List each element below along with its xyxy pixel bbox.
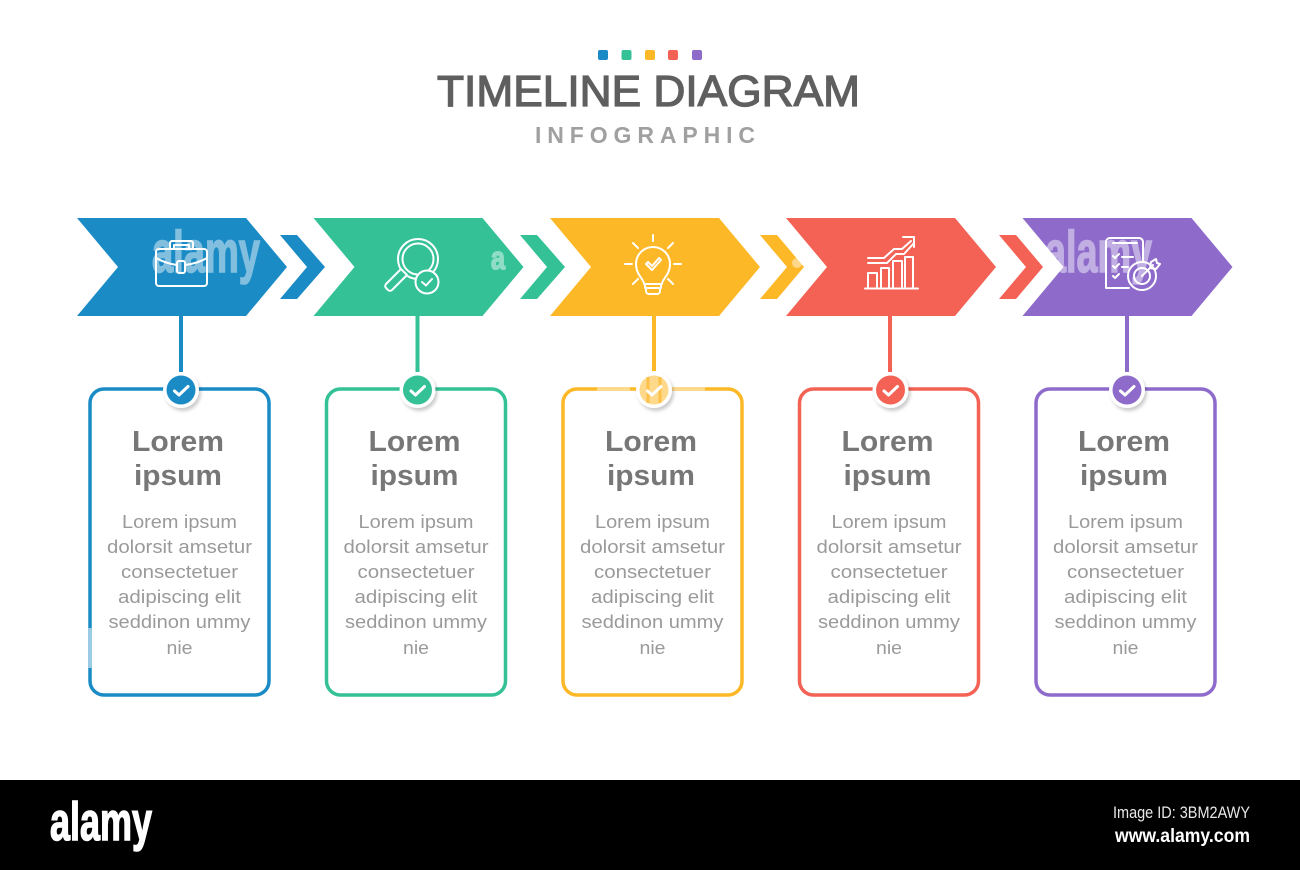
footer logo: alamy [50, 792, 152, 852]
card heading: Lorem [605, 426, 697, 458]
card heading: ipsum [370, 460, 458, 492]
card heading: ipsum [1080, 460, 1168, 492]
card heading: ipsum [844, 460, 932, 492]
connector line [179, 316, 183, 372]
content card [800, 389, 978, 695]
watermark spot [792, 258, 802, 268]
card body text: dolorsit amsetur [580, 537, 725, 557]
check badge [400, 372, 436, 408]
connector line [652, 316, 656, 371]
check badge [872, 372, 908, 408]
check badge [636, 372, 672, 408]
card body text: consectetuer [830, 562, 948, 582]
step 2: green [314, 218, 565, 695]
content card [1036, 389, 1215, 695]
card body text: Lorem ipsum [832, 512, 946, 532]
watermark fade on card edge [88, 628, 92, 668]
card body text: adipiscing elit [1064, 587, 1187, 607]
card body text: adipiscing elit [118, 587, 241, 607]
content card [326, 389, 506, 695]
content card [563, 389, 742, 695]
card body text: consectetuer [121, 562, 238, 582]
card heading: Lorem [132, 426, 224, 458]
image id: Image ID: 3BM2AWY [1113, 803, 1250, 822]
card body text: adipiscing elit [354, 587, 478, 607]
card body text: dolorsit amsetur [107, 537, 252, 557]
card heading: Lorem [842, 426, 934, 458]
card body text: dolorsit amsetur [1053, 537, 1198, 557]
connector line [888, 316, 892, 372]
icon: briefcase [156, 241, 207, 286]
card heading: ipsum [607, 460, 695, 492]
connector chevron [520, 235, 565, 299]
watermark fade on card edge [597, 387, 705, 391]
card body text: dolorsit amsetur [816, 537, 962, 557]
footer bar [0, 780, 1300, 870]
heading: TIMELINE DIAGRAM [437, 67, 860, 116]
step 1: blue [77, 218, 325, 695]
card heading: Lorem [368, 426, 460, 458]
card heading: Lorem [1078, 426, 1170, 458]
icon: checklist with target [1106, 238, 1160, 290]
card body text: Lorem ipsum [595, 512, 710, 532]
connector line [416, 316, 420, 372]
card body text: adipiscing elit [828, 587, 950, 607]
subheading: INFOGRAPHIC [535, 122, 755, 148]
connector chevron [999, 235, 1043, 299]
card body text: Lorem ipsum [1068, 512, 1183, 532]
card body text: nie [1112, 638, 1138, 658]
card body text: nie [403, 638, 429, 658]
arrow banner [1022, 218, 1232, 316]
title block [437, 50, 860, 148]
card body text: adipiscing elit [591, 587, 714, 607]
card body text: seddinon ummy [345, 612, 487, 632]
icon: light bulb with check [625, 235, 681, 294]
step 3: yellow [550, 218, 804, 695]
website: www.alamy.com [1114, 826, 1250, 847]
colour key squares [598, 50, 702, 60]
card body text: nie [876, 638, 902, 658]
icon: growth bar chart [865, 237, 918, 288]
icon: magnifier with check [385, 239, 438, 294]
card body text: consectetuer [358, 562, 475, 582]
step 4: red [786, 218, 1043, 695]
arrow banner [77, 218, 287, 316]
card body text: seddinon ummy [582, 612, 724, 632]
card body text: dolorsit amsetur [344, 537, 488, 557]
content card [90, 389, 269, 695]
card body text: consectetuer [594, 562, 711, 582]
arrow banner [786, 218, 996, 316]
card body text: seddinon ummy [1054, 612, 1196, 632]
watermark: a [491, 240, 505, 276]
card body text: nie [166, 638, 192, 658]
step 5: purple [1022, 218, 1232, 695]
arrow banner [550, 218, 760, 316]
watermark: alamy [152, 220, 260, 285]
connector chevron [280, 235, 325, 299]
connector line [1125, 316, 1129, 372]
check badge [1109, 372, 1145, 408]
card body text: Lorem ipsum [122, 512, 237, 532]
arrow banner [314, 218, 524, 316]
watermark: alamy [1045, 220, 1152, 285]
card body text: seddinon ummy [818, 612, 960, 632]
card body text: seddinon ummy [108, 612, 250, 632]
check badge [163, 372, 199, 408]
card body text: Lorem ipsum [358, 512, 474, 532]
connector chevron [760, 235, 804, 299]
card heading: ipsum [134, 460, 222, 492]
card body text: nie [640, 638, 666, 658]
card body text: consectetuer [1067, 562, 1184, 582]
